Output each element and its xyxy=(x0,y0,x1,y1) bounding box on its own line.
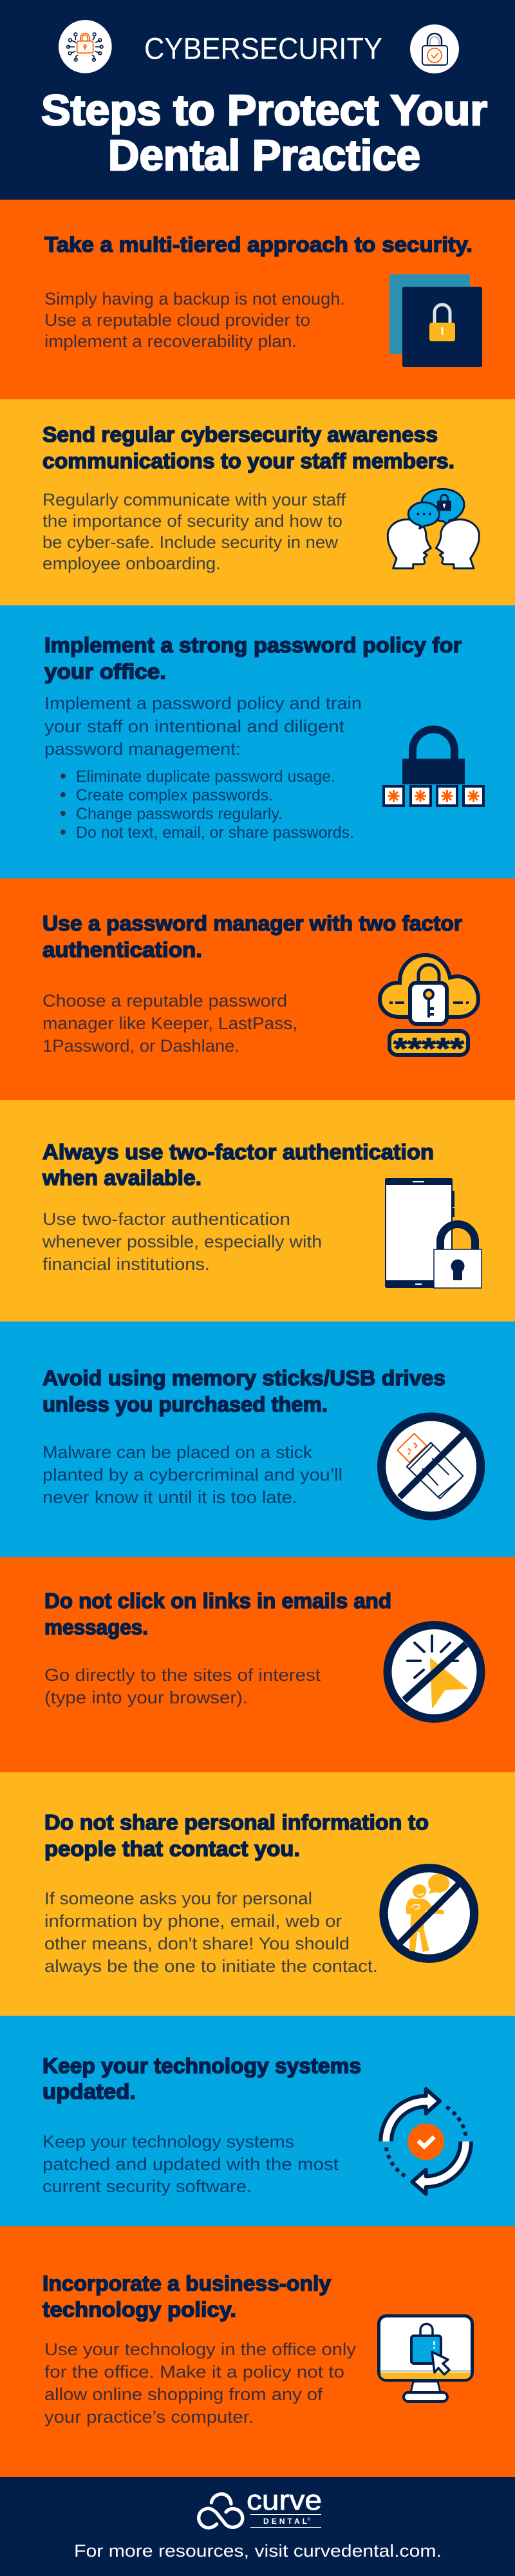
text block: your practice’s computer. xyxy=(44,2407,254,2427)
heading xyxy=(42,1141,434,1190)
text block: your staff on intentional and diligent xyxy=(44,717,345,736)
panel: technology updates xyxy=(0,2016,515,2226)
bullet list xyxy=(61,768,354,842)
icon: layered lock cards xyxy=(389,274,482,367)
bullet list: Do not text, email, or share passwords. xyxy=(76,824,354,842)
text block: manager like Keeper, LastPass, xyxy=(42,1014,297,1033)
panel: awareness communications xyxy=(0,399,515,605)
heading: Always use two-factor authentication xyxy=(42,1141,434,1164)
text block: be cyber-safe. Include security in new xyxy=(42,533,338,552)
icon: phone and padlock xyxy=(385,1178,482,1288)
heading xyxy=(42,912,462,962)
text block xyxy=(44,1889,378,1976)
text block: Use a reputable cloud provider to xyxy=(44,310,310,330)
title: Steps to Protect Your xyxy=(41,86,487,135)
text block xyxy=(44,2340,357,2427)
panel: business-only policy xyxy=(0,2226,515,2477)
text block: allow online shopping from any of xyxy=(44,2385,323,2404)
text block: always be the one to initiate the contact. xyxy=(44,1956,378,1976)
heading: messages. xyxy=(44,1616,148,1640)
heading: Take a multi-tiered approach to security. xyxy=(44,233,473,257)
text block: patched and updated with the most xyxy=(42,2155,339,2174)
heading: updated. xyxy=(42,2080,136,2104)
text block: Use your technology in the office only xyxy=(44,2340,357,2359)
text block: Choose a reputable password xyxy=(42,991,287,1010)
text block: Implement a password policy and train xyxy=(44,694,362,713)
icon: cloud lock with key xyxy=(380,955,478,1065)
heading: Do not click on links in emails and xyxy=(44,1589,391,1613)
heading: authentication. xyxy=(42,938,202,962)
icon: padlock with check xyxy=(410,24,459,73)
panel: password manager xyxy=(0,878,515,1100)
heading: communications to your staff members. xyxy=(42,450,454,473)
text block: the importance of security and how to xyxy=(42,511,342,531)
panel: personal information xyxy=(0,1772,515,2016)
heading: cybersecurity: CYBERSECURITY xyxy=(144,31,382,66)
panel: USB drives xyxy=(0,1321,515,1557)
icon: cloud lock with key: ***** xyxy=(393,1032,464,1065)
heading: Keep your technology systems xyxy=(42,2054,361,2078)
icon: circuit padlock xyxy=(59,20,112,73)
heading xyxy=(44,1811,429,1861)
bullet list: Create complex passwords. xyxy=(76,786,273,804)
text block: password management: xyxy=(44,739,241,759)
text block: Regularly communicate with your staff xyxy=(42,490,346,509)
icon: refresh arrows with check xyxy=(380,2089,471,2194)
heading: when available. xyxy=(42,1166,201,1190)
text block xyxy=(44,1665,321,1707)
heading xyxy=(42,423,454,473)
text block: Keep your technology systems xyxy=(42,2132,294,2151)
text block xyxy=(44,694,362,759)
heading xyxy=(42,1367,445,1417)
icon: two heads with speech bubbles xyxy=(388,489,479,569)
logo: Curve Dental: ® xyxy=(308,2517,310,2522)
text block: employee onboarding. xyxy=(42,554,221,573)
bullet list: Change passwords regularly. xyxy=(76,805,283,823)
logo: Curve Dental: curve xyxy=(247,2485,322,2516)
text block xyxy=(44,289,345,351)
heading xyxy=(42,2054,361,2104)
heading: Incorporate a business-only xyxy=(42,2272,331,2296)
text block: for the office. Make it a policy not to xyxy=(44,2362,344,2382)
text block xyxy=(42,991,297,1056)
heading: Avoid using memory sticks/USB drives xyxy=(42,1367,445,1390)
heading: your office. xyxy=(44,660,166,684)
text block: Use two-factor authentication xyxy=(42,1209,290,1229)
panel: multi-tiered approach xyxy=(0,200,515,399)
logo mark xyxy=(199,2494,243,2528)
title: Dental Practice xyxy=(108,131,420,180)
text block: If someone asks you for personal xyxy=(44,1889,312,1908)
text block: Go directly to the sites of interest xyxy=(44,1665,321,1685)
heading: technology policy. xyxy=(42,2298,236,2322)
heading xyxy=(44,1589,391,1640)
text block: current security software. xyxy=(42,2177,252,2196)
icon: crossed-out person speaking xyxy=(384,1868,474,1958)
text block: implement a recoverability plan. xyxy=(44,332,297,351)
text block: 1Password, or Dashlane. xyxy=(42,1036,239,1056)
panel: header xyxy=(0,0,515,200)
text block: Simply having a backup is not enough. xyxy=(44,289,345,308)
title xyxy=(41,86,487,180)
text block: planted by a cybercriminal and you’ll xyxy=(42,1465,342,1484)
icon: monitor with shopping bag xyxy=(379,2316,473,2401)
icon: crossed-out click cursor xyxy=(388,1625,481,1718)
heading: Use a password manager with two factor xyxy=(42,912,462,936)
footer text: For more resources, visit curvedental.com. xyxy=(74,2541,442,2561)
icon: padlock with password boxes xyxy=(384,729,483,806)
icon: crossed-out USB stick xyxy=(382,1417,481,1516)
text block: (type into your browser). xyxy=(44,1688,248,1707)
text block xyxy=(42,1209,322,1274)
panel: footer xyxy=(0,2477,515,2576)
text block: whenever possible, especially with xyxy=(42,1232,322,1251)
text block: never know it until it is too late. xyxy=(42,1488,297,1507)
panel: links in emails xyxy=(0,1557,515,1772)
text block: other means, don't share! You should xyxy=(44,1934,350,1953)
text block: financial institutions. xyxy=(42,1255,210,1274)
heading: people that contact you. xyxy=(44,1837,300,1861)
heading: Implement a strong password policy for xyxy=(44,634,462,658)
heading: Do not share personal information to xyxy=(44,1811,429,1835)
text block xyxy=(42,1443,342,1507)
bullet list: Eliminate duplicate password usage. xyxy=(76,768,335,786)
heading: Send regular cybersecurity awareness xyxy=(42,423,438,447)
logo: Curve Dental xyxy=(199,2485,322,2528)
heading xyxy=(42,2272,331,2322)
text block: Malware can be placed on a stick xyxy=(42,1443,313,1462)
text block xyxy=(42,490,346,573)
heading: unless you purchased them. xyxy=(42,1393,328,1417)
panel: two-factor authentication xyxy=(0,1100,515,1321)
panel: password policy xyxy=(0,605,515,878)
heading xyxy=(44,634,462,684)
text block: information by phone, email, web or xyxy=(44,1911,342,1931)
logo: Curve Dental: DENTAL xyxy=(263,2517,307,2526)
text block xyxy=(42,2132,339,2196)
